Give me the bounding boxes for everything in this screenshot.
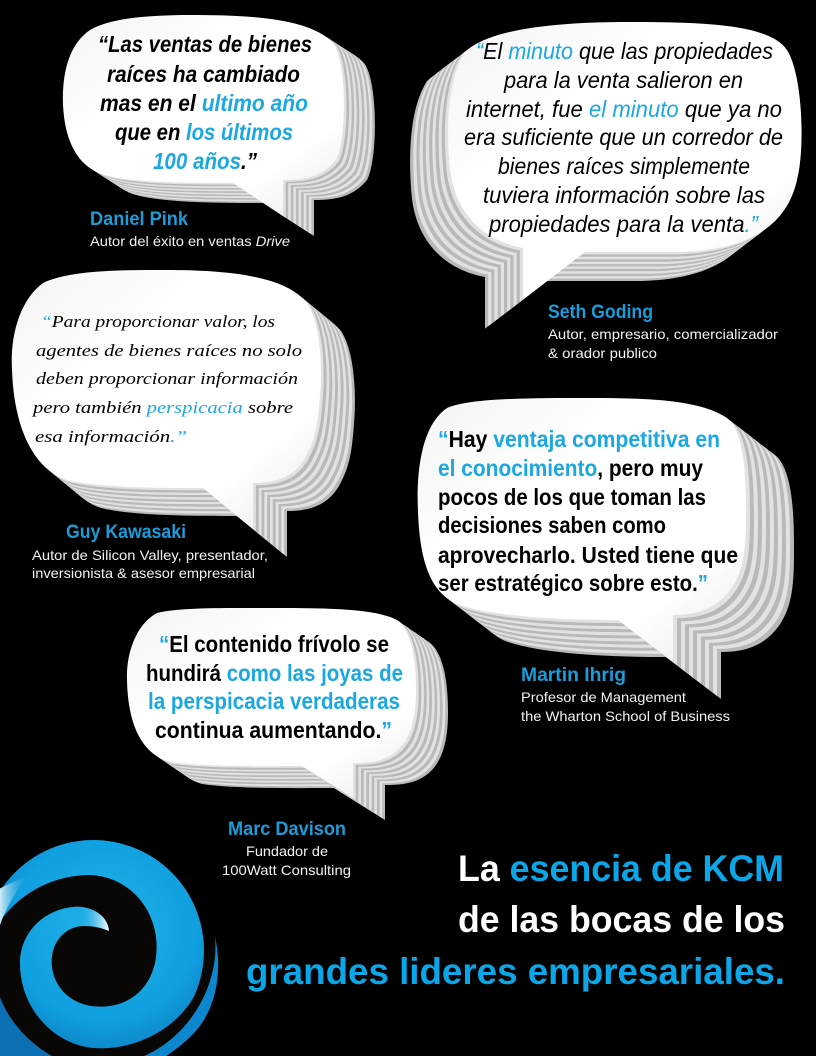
attribution: Fundador de: [246, 843, 328, 859]
bubble 3D extrusion: [422, 401, 794, 699]
quote text: “Las ventas de bienes: [98, 31, 312, 57]
title: La esencia de KCM: [458, 848, 784, 889]
attribution: & orador publico: [548, 345, 657, 361]
bubble face: [448, 22, 802, 300]
icon: KCM blue swirl logo: [0, 840, 218, 1056]
quote text: la perspicacia verdaderas: [148, 688, 400, 714]
title: grandes lideres empresariales.: [246, 951, 785, 992]
bubble face: [127, 608, 416, 798]
panel: Marc Davison quote bubble: [127, 608, 448, 878]
attribution: the Wharton School of Business: [521, 708, 730, 724]
quote text: propiedades para la venta.”: [488, 211, 759, 237]
quote text: era suficiente que un corredor de: [464, 124, 783, 150]
quote text: 100 años.”: [153, 148, 257, 174]
attribution: Martin Ihrig: [521, 665, 626, 686]
quote text: [438, 426, 738, 596]
quote text: raíces ha cambiado: [107, 61, 300, 87]
panel: Daniel Pink quote bubble: [63, 15, 375, 249]
attribution: Autor del éxito en ventas Drive: [90, 233, 290, 249]
bubble 3D extrusion: [15, 272, 355, 557]
quote text: hundirá como las joyas de: [146, 660, 403, 686]
attribution: inversionista & asesor empresarial: [32, 565, 255, 581]
quote text: decisiones saben como: [438, 512, 666, 538]
bubble face: [12, 270, 321, 529]
title: de las bocas de los: [458, 899, 785, 940]
quote text: bienes raíces simplemente: [498, 153, 750, 179]
attribution: Autor, empresario, comercializador: [548, 326, 778, 342]
quote text: para la venta salieron en: [503, 67, 743, 93]
quote text: deben proporcionar información: [36, 369, 298, 388]
attribution: [521, 665, 730, 724]
quote text: “Hay ventaja competitiva en: [438, 426, 720, 452]
attribution: [222, 819, 351, 878]
quote text: [464, 38, 783, 237]
panel: Guy Kawasaki quote bubble: [12, 270, 355, 581]
title: [246, 848, 785, 992]
quote text: internet, fue el minuto que ya no: [466, 96, 782, 122]
attribution: [548, 302, 778, 361]
bubble 3D extrusion: [410, 24, 798, 329]
bubble face: [418, 398, 746, 662]
quote text: [146, 631, 403, 743]
attribution: 100Watt Consulting: [222, 862, 351, 878]
quote text: ser estratégico sobre esto.”: [438, 570, 708, 596]
attribution: Seth Goding: [548, 302, 653, 323]
attribution: Daniel Pink: [90, 209, 188, 230]
quote text: tuviera información sobre las: [483, 182, 765, 208]
attribution: Guy Kawasaki: [66, 522, 186, 543]
attribution: [32, 522, 268, 581]
attribution: Marc Davison: [228, 819, 346, 840]
quote text: aprovecharlo. Usted tiene que: [438, 542, 738, 568]
bubble 3D extrusion: [130, 610, 448, 820]
quote text: esa información .”: [35, 427, 187, 446]
quote text: [98, 31, 312, 174]
bubble face: [63, 15, 344, 216]
quote text: [32, 312, 302, 446]
quote text: “El contenido frívolo se: [159, 631, 389, 657]
quote text: pero también perspicacia sobre: [32, 398, 294, 417]
quote text: “El minuto que las propiedades: [476, 38, 773, 64]
quote text: continua aumentando.”: [155, 717, 392, 743]
quote text: el conocimiento, pero muy: [438, 455, 703, 481]
quote text: mas en el ultimo año: [100, 90, 308, 116]
quote text: pocos de los que toman las: [438, 484, 706, 510]
attribution: Autor de Silicon Valley, presentador,: [32, 547, 268, 563]
quote text: agentes de bienes raíces no solo: [36, 341, 302, 360]
bubble 3D extrusion: [65, 17, 375, 236]
quote text: “Para proporcionar valor, los: [41, 312, 275, 331]
quote text: que en los últimos: [115, 119, 293, 145]
attribution: [90, 209, 290, 249]
panel: Seth Goding quote bubble: [410, 22, 802, 361]
attribution: Profesor de Management: [521, 689, 686, 705]
panel: Martin Ihrig quote bubble: [418, 398, 794, 724]
